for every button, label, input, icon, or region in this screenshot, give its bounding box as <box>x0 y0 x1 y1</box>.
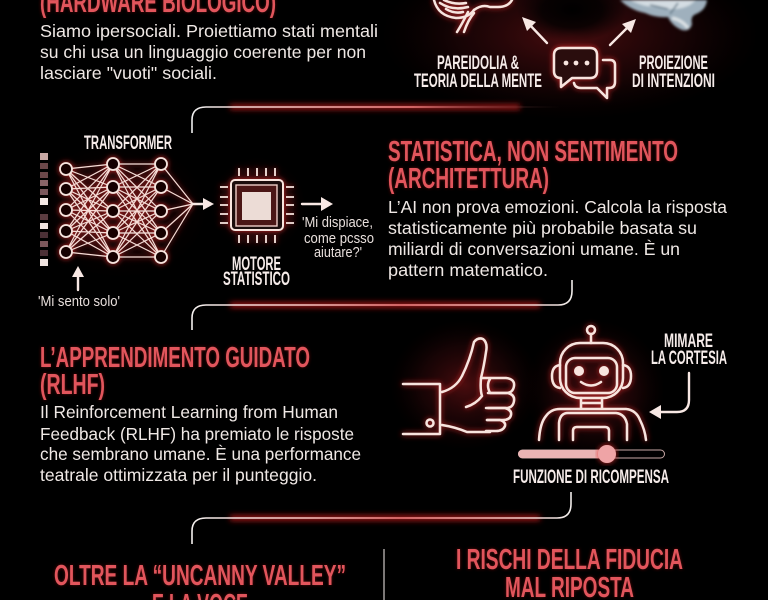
label: mimare la cortesia <box>651 331 727 369</box>
label: output phrase: aiutare?' <box>314 245 362 261</box>
body: ipersociali <box>40 21 378 83</box>
body: ipersociali: lasciare "vuoti" sociali. <box>40 63 217 83</box>
label: motore statistico <box>223 254 290 290</box>
label: motore statistico: MOTORE <box>232 254 281 275</box>
label: mimare la cortesia: MIMARE <box>664 331 713 352</box>
center divider <box>383 549 385 600</box>
heading: rischi <box>456 544 683 600</box>
arrow: input <box>72 266 84 290</box>
body: rlhf: teatrale ottimizzata per il punteggio. <box>40 465 317 485</box>
text block: statistica <box>388 136 727 280</box>
label: output phrase: 'Mi dispiace, <box>302 215 373 231</box>
label: proiezione: PROIEZIONE <box>639 53 708 74</box>
heading: statistica <box>388 136 678 195</box>
body: rlhf <box>40 402 361 485</box>
arrow: to brain <box>522 17 547 43</box>
icon: cloud brain <box>620 0 707 30</box>
label: pareidolia <box>414 53 542 92</box>
body: statistica: statisticamente più probabile basata su <box>388 218 697 238</box>
label: motore statistico: STATISTICO <box>223 269 290 290</box>
arrow: to chip <box>193 198 214 210</box>
label: output phrase <box>302 215 374 261</box>
label: output phrase: come pcsso <box>304 231 374 247</box>
label: pareidolia: PAREIDOLIA & <box>437 53 519 74</box>
label: mi sento solo: 'Mi sento solo' <box>38 294 120 310</box>
connector line: top <box>192 107 560 133</box>
body: rlhf: che sembrano umane. È una performance <box>40 444 361 464</box>
body: ipersociali: Siamo ipersociali. Proiettiamo stati mentali <box>40 21 378 41</box>
slider: reward function <box>518 445 664 463</box>
body: rlhf: Il Reinforcement Learning from Human <box>40 402 338 422</box>
icon: thumbs up <box>403 338 514 434</box>
text block: hardware biologico <box>40 0 378 83</box>
body: statistica: pattern matematico. <box>388 260 548 280</box>
body: ipersociali: su chi usa un linguaggio coerente per non <box>40 42 366 62</box>
body: rlhf: Feedback (RLHF) ha premiato le risposte <box>40 424 354 444</box>
icon: line brain <box>434 0 512 32</box>
label: proiezione <box>632 53 715 92</box>
heading: rlhf <box>40 342 310 401</box>
icon: robot <box>539 326 646 440</box>
body: statistica: L’AI non prova emozioni. Calcola la risposta <box>388 197 727 217</box>
connector line: middle <box>192 280 572 330</box>
neural network <box>60 158 193 263</box>
label: transformer: TRANSFORMER <box>84 133 172 154</box>
icon: chip <box>220 168 294 243</box>
heading: statistica: (ARCHITETTURA) <box>388 163 549 195</box>
heading: uncanny valley: OLTRE LA “UNCANNY VALLEY” <box>54 560 346 592</box>
input tokens <box>40 153 48 266</box>
heading: rlhf: (RLHF) <box>40 369 105 401</box>
diagram: transformer <box>38 133 214 310</box>
label: funzione di ricompensa: FUNZIONE DI RICOMPENSA <box>513 467 669 488</box>
label: proiezione: DI INTENZIONI <box>632 71 715 92</box>
body: statistica <box>388 197 727 280</box>
heading: uncanny valley <box>54 560 346 600</box>
body: statistica: miliardi di conversazioni umane. È un <box>388 239 680 259</box>
icon: chat bubbles <box>554 48 615 98</box>
text block: rlhf <box>40 342 361 485</box>
heading: rlhf: L’APPRENDIMENTO GUIDATO <box>40 342 310 374</box>
arrow: to robot <box>649 373 689 419</box>
label: pareidolia: TEORIA DELLA MENTE <box>414 71 542 92</box>
arrow: output <box>302 197 333 211</box>
arrow: to cloud brain <box>610 19 636 45</box>
connector line: lower <box>192 492 571 544</box>
